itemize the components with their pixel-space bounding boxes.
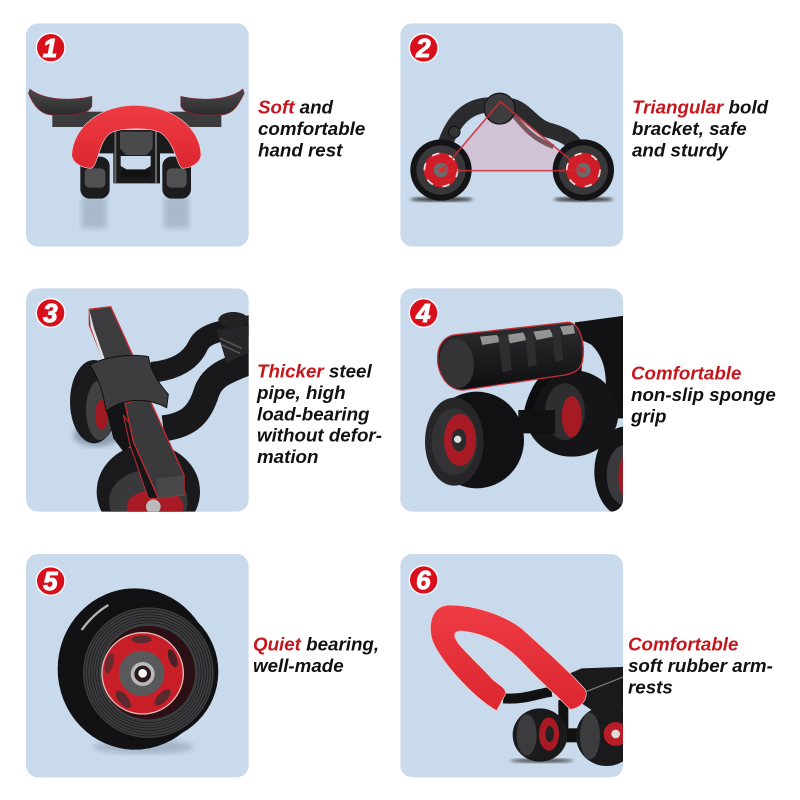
red armrest <box>72 105 201 168</box>
text: feature 6: soft rubber arm- <box>628 655 773 676</box>
panel 2: triangular bracket <box>400 23 623 247</box>
badge 2 <box>409 33 438 63</box>
badge 6 <box>409 565 438 595</box>
badge 3: 3 <box>43 298 58 328</box>
panel 4: sponge grip <box>400 288 623 512</box>
badge 5: 5 <box>43 566 58 596</box>
text: feature 2: and sturdy <box>632 140 729 160</box>
text: feature 1: comfortable <box>258 118 365 139</box>
text: feature 4: Comfortable <box>631 362 741 384</box>
center frame <box>95 130 178 183</box>
dark bracket <box>106 402 130 451</box>
frame <box>503 667 628 742</box>
badge 1: 1 <box>43 33 57 63</box>
frame behind <box>575 316 625 418</box>
text: feature 1: hand rest <box>258 140 343 160</box>
text: feature 2: Triangular bold <box>632 96 768 118</box>
wheel shadow <box>73 423 120 447</box>
left pad <box>29 89 92 115</box>
text: feature 6: Comfortable <box>628 634 738 654</box>
back wheel <box>70 360 112 444</box>
text: feature 3: Thicker steel <box>257 360 372 382</box>
badge 3 <box>36 298 65 328</box>
text: feature 6: rests <box>628 676 673 698</box>
text: feature 4: grip <box>630 406 666 426</box>
badge 4: 4 <box>415 298 431 328</box>
badge 4 <box>409 298 438 328</box>
tyre face <box>78 602 218 742</box>
ground shadow <box>510 759 573 763</box>
panel 3: steel pipe <box>26 288 249 512</box>
lower square tube <box>123 397 184 498</box>
right wheel <box>576 710 623 766</box>
frame lower strand <box>513 115 553 147</box>
tyre <box>58 588 212 750</box>
upper square tube <box>89 307 133 360</box>
text: feature 3: pipe, high <box>256 382 346 403</box>
right pad <box>181 89 244 115</box>
left wheel <box>410 139 472 201</box>
wheel shadows <box>82 197 189 228</box>
triangle line overlay <box>442 102 583 171</box>
frame arch <box>445 105 578 148</box>
inner dark <box>102 626 195 719</box>
text: feature 4: non-slip sponge <box>631 384 776 405</box>
text: feature 5: well-made <box>253 655 344 676</box>
triangle highlight <box>442 102 583 171</box>
text: feature 3: load-bearing <box>257 404 370 424</box>
pin <box>449 126 460 138</box>
text: feature 5: Quiet bearing, <box>253 634 379 654</box>
back arms <box>152 312 253 428</box>
front wheel <box>96 447 200 512</box>
panel 1: hand rest <box>26 23 249 247</box>
arm bar <box>52 112 221 127</box>
panel 5: wheel <box>26 554 249 777</box>
wheels <box>80 157 191 199</box>
badge 6: 6 <box>416 565 431 595</box>
badge 1 <box>36 33 65 63</box>
panel 6: rubber armrest <box>400 554 637 777</box>
text: feature 1: Soft and <box>258 96 333 118</box>
ground shadows <box>410 197 613 202</box>
sponge grip <box>437 322 583 390</box>
clamp <box>90 355 168 411</box>
shadow <box>93 739 193 754</box>
axle <box>518 410 555 433</box>
red hub <box>102 633 183 714</box>
hub <box>484 93 515 124</box>
right wheel <box>553 139 614 201</box>
right wheel <box>594 426 623 512</box>
badge 2: 2 <box>415 33 431 63</box>
front wheel <box>425 392 524 488</box>
text: feature 2: bracket, safe <box>632 118 747 139</box>
red arm <box>431 605 586 711</box>
badge 5 <box>36 566 65 596</box>
back wheel <box>525 368 618 457</box>
tyre highlight <box>82 605 108 630</box>
text: feature 3: mation <box>257 446 318 467</box>
text: feature 3: without defor- <box>257 424 382 446</box>
left wheel <box>513 708 567 762</box>
ribbed ring <box>85 609 212 736</box>
